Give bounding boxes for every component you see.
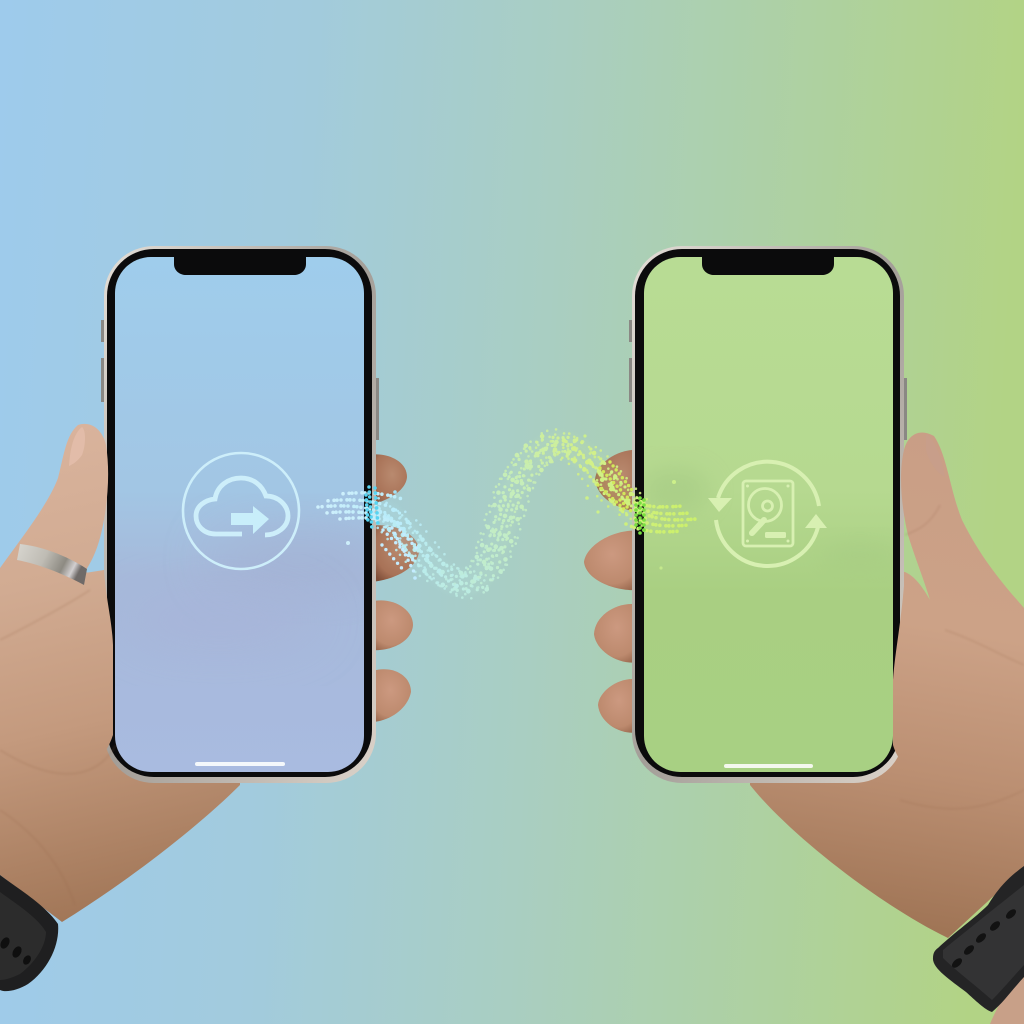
notch — [174, 255, 306, 275]
phone body — [632, 246, 904, 783]
left phone fingers — [370, 454, 419, 722]
finger: left index — [370, 454, 407, 505]
particles: big sparkles — [369, 435, 651, 592]
right phone fingers — [584, 450, 640, 733]
left wristband — [0, 875, 58, 991]
finger: left middle — [370, 525, 419, 582]
side buttons — [629, 320, 632, 342]
home bar — [195, 762, 285, 766]
notch — [702, 255, 834, 275]
finger: left little — [370, 669, 411, 722]
icon: hard drive with sync arrows — [708, 462, 827, 566]
particles: outer band — [360, 429, 660, 598]
ring — [17, 544, 87, 585]
particles: stray — [346, 434, 676, 580]
phone body — [104, 246, 376, 783]
particles: core band — [373, 437, 647, 590]
finger: right index — [595, 450, 640, 512]
particles: right arrow tip — [626, 499, 696, 532]
screen — [115, 257, 364, 772]
palm creases — [0, 590, 116, 905]
left hand front with thumb — [0, 424, 116, 905]
screen shading — [654, 476, 696, 502]
right hand back — [750, 572, 1024, 938]
screen shading — [120, 530, 390, 650]
home bar — [724, 764, 813, 768]
finger: right little — [598, 679, 640, 733]
icon: cloud with arrow — [183, 453, 299, 569]
thumb nail — [69, 427, 85, 466]
right hand front with thumb — [893, 432, 1024, 809]
screen — [644, 257, 893, 772]
finger: right ring — [594, 604, 640, 663]
thumb nail — [926, 434, 945, 477]
particles: bright cyan over left bezel — [366, 487, 378, 530]
finger: right middle — [584, 531, 640, 590]
right wrist and wristband — [933, 866, 1024, 1024]
particles: bright green over right bezel — [636, 498, 644, 537]
side buttons — [101, 320, 104, 342]
particles: left arrow tip — [318, 493, 402, 524]
palm creases — [900, 505, 1024, 809]
particles: over right index finger — [598, 462, 632, 512]
right phone — [629, 246, 907, 783]
data particle stream — [318, 429, 696, 598]
particles: on left middle finger — [382, 528, 418, 572]
left phone — [101, 246, 390, 783]
finger: left ring — [370, 600, 413, 650]
particles: soft glow — [380, 444, 640, 583]
left hand back — [0, 568, 240, 922]
